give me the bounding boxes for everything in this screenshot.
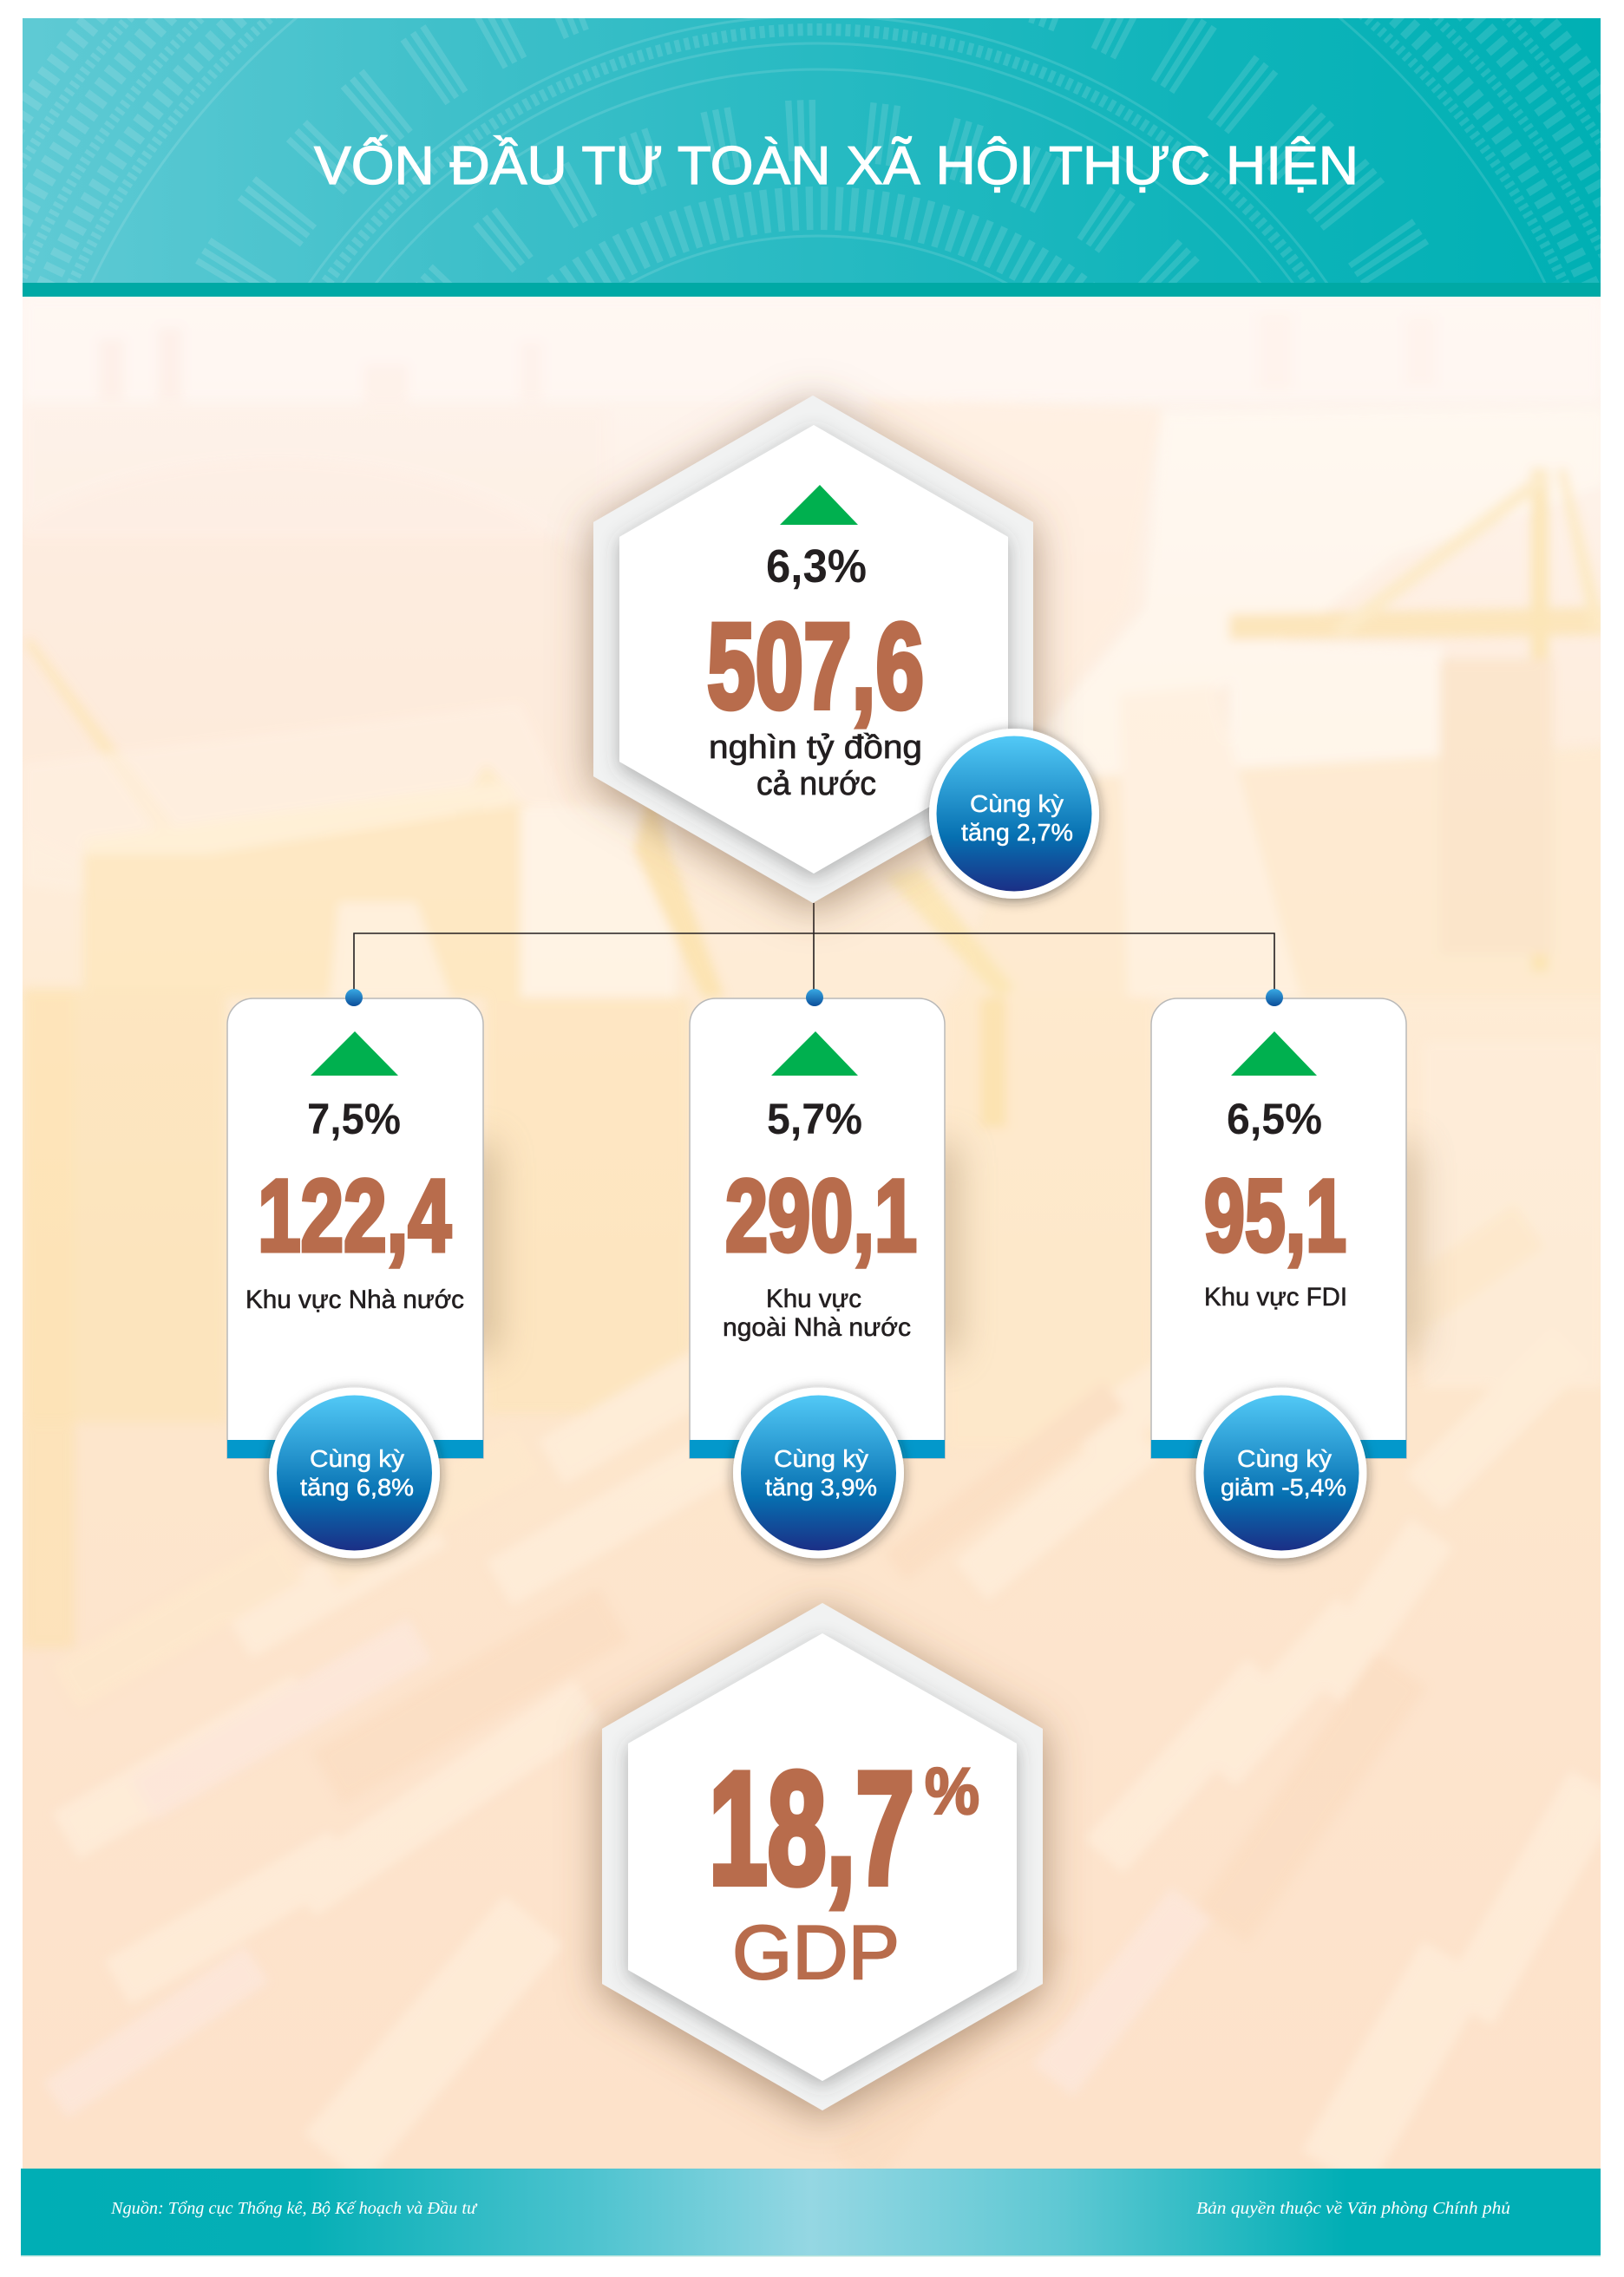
same-period badge	[733, 1388, 904, 1558]
panel: non-state sector card	[690, 989, 956, 1558]
unit label: nghìn tỷ đồng	[709, 730, 922, 766]
percent sign: %	[925, 1755, 979, 1829]
same-period badge: Cùng kỳ	[774, 1445, 868, 1472]
same-period badge	[1195, 1388, 1367, 1558]
growth percentage: 6,5%	[1227, 1095, 1322, 1143]
same-period badge: tăng 3,9%	[765, 1474, 877, 1501]
copyright note: Bản quyền thuộc về Văn phòng Chính phủ	[1196, 2199, 1510, 2218]
title: VỐN ĐẦU TƯ TOÀN XÃ HỘI THỰC HIỆN	[314, 136, 1359, 196]
same-period badge: tăng 2,7%	[961, 819, 1073, 846]
growth percentage: 7,5%	[307, 1095, 401, 1143]
panel: share of GDP hexagon	[602, 1603, 1043, 2110]
same-period badge	[269, 1388, 440, 1558]
icon: green up triangle	[780, 485, 858, 525]
same-period badge	[929, 729, 1099, 899]
header banner	[23, 18, 1601, 885]
growth percentage: 6,3%	[766, 540, 867, 592]
same-period badge: Cùng kỳ	[310, 1445, 404, 1472]
same-period badge: tăng 6,8%	[300, 1474, 414, 1501]
value: 290,1	[725, 1159, 917, 1273]
connector dot	[345, 989, 363, 1006]
sector label line 2: ngoài Nhà nước	[723, 1313, 911, 1342]
same-period badge: Cùng kỳ	[1237, 1445, 1332, 1472]
connector lines	[354, 903, 1274, 998]
connector dot	[806, 989, 823, 1006]
growth percentage: 5,7%	[767, 1095, 862, 1143]
sector label: Khu vực Nhà nước	[246, 1286, 464, 1314]
scope label: cả nước	[756, 766, 876, 802]
value: 95,1	[1204, 1159, 1346, 1273]
sector label: Khu vực FDI	[1204, 1283, 1347, 1312]
icon: green up triangle	[311, 1031, 398, 1076]
same-period badge: giảm -5,4%	[1221, 1474, 1346, 1501]
icon: green up triangle	[1231, 1031, 1317, 1076]
value: 122,4	[258, 1159, 451, 1273]
GDP label: GDP	[732, 1909, 900, 1995]
panel: total national investment hexagon	[593, 396, 1099, 903]
source note: Nguồn: Tổng cục Thống kê, Bộ Kế hoạch và Đầu tư	[110, 2199, 478, 2218]
icon: green up triangle	[771, 1031, 858, 1076]
total value: 507,6	[707, 598, 924, 734]
panel: FDI sector card	[1151, 989, 1418, 1558]
share value: 18,7	[709, 1738, 914, 1917]
panel: state sector card	[227, 989, 494, 1558]
sector label line 1: Khu vực	[766, 1285, 861, 1313]
connector dot	[1266, 989, 1283, 1006]
decorative bronze drum pattern	[23, 18, 1601, 283]
footer bar	[21, 2169, 1601, 2257]
same-period badge: Cùng kỳ	[970, 790, 1064, 817]
